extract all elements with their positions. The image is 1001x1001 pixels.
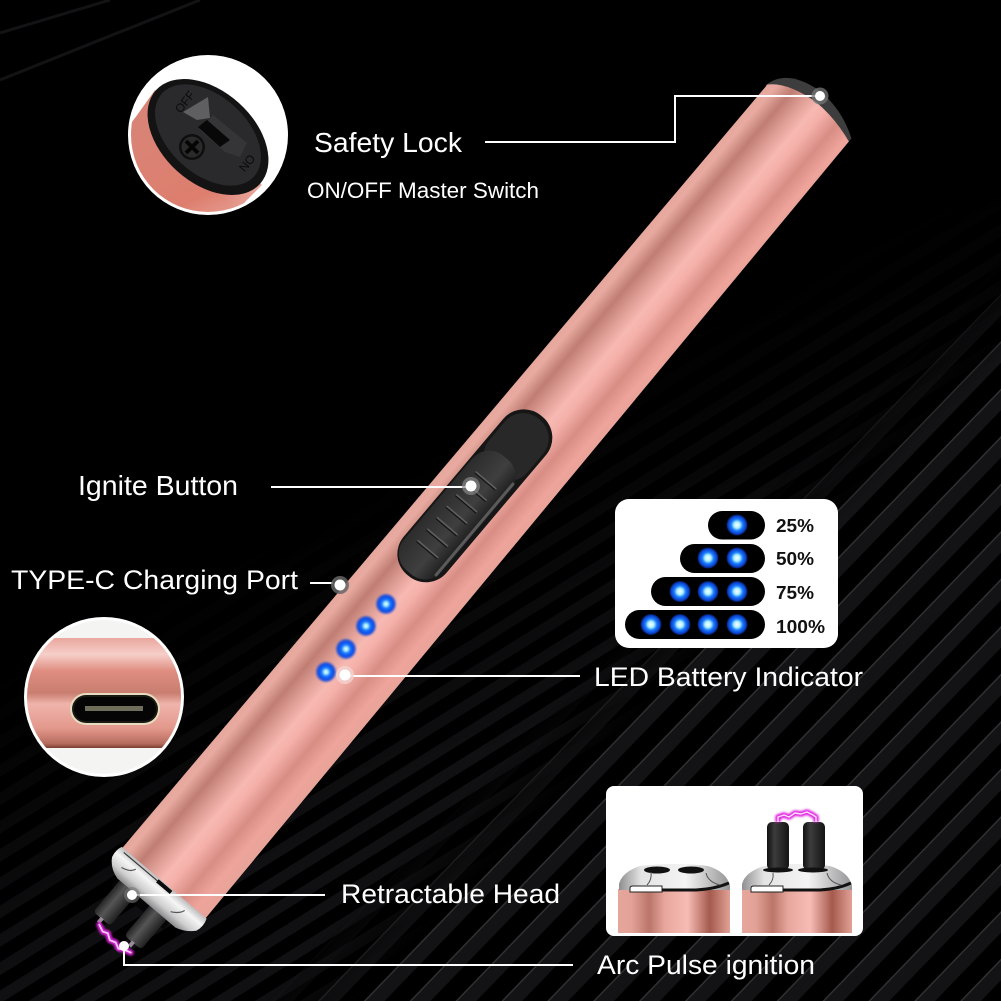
75% row: 75% [776,583,814,603]
callout: arc pulse [119,941,815,980]
75% row [651,577,814,606]
lighter body [69,61,871,981]
arc spark [95,925,131,956]
inset circle: USB-C port [20,617,190,777]
callout: retractable head: Retractable Head [341,879,560,909]
100% row: 100% [776,617,825,637]
ignite button slot [386,398,563,593]
callout: LED indicator [336,662,863,692]
safety lock cap [763,62,862,152]
LED indicators on body [315,593,397,683]
25% row: 25% [776,516,814,536]
inset circle: safety switch: OFF [172,88,198,116]
100% row [625,610,825,639]
battery level panel [615,499,838,648]
metal tube [121,71,862,919]
50% row: 50% [776,549,814,569]
inset circle: safety switch: ON [236,152,258,174]
electrodes [88,873,174,958]
callout: safety lock [307,88,828,203]
inset circle: safety switch [128,55,288,215]
25% row [708,511,814,540]
arc spark [778,812,816,822]
head extended with arc [742,812,852,933]
callout: retractable head [124,879,560,909]
callout: ignite button [78,470,480,501]
callout: LED indicator: LED Battery Indicator [594,662,863,692]
callout: safety lock: ON/OFF Master Switch [307,178,539,203]
slider button [390,442,525,588]
callout: ignite button: Ignite Button [78,470,238,501]
callout: safety lock: Safety Lock [314,127,463,158]
retractable head panel [606,786,863,936]
silver head [103,846,208,940]
USB-C port [70,693,160,725]
callout: arc pulse: Arc Pulse ignition [597,950,815,980]
head retracted [618,864,730,933]
50% row [680,544,814,573]
callout: charging port: TYPE-C Charging Port [11,565,299,595]
